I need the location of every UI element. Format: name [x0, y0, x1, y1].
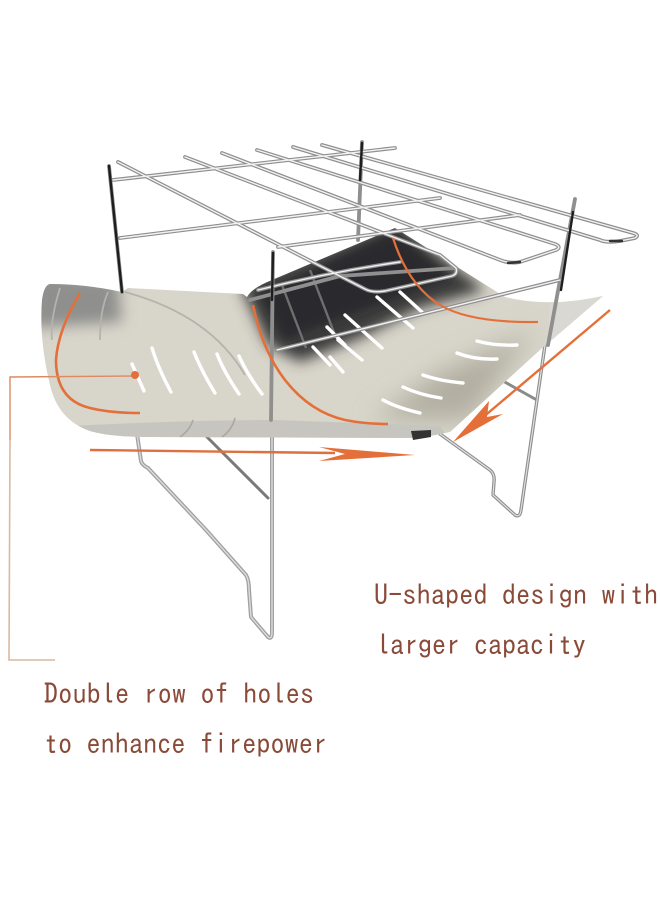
text: U-shaped design caption: larger capacity: [376, 631, 586, 659]
back wire posts and legs behind tray: [137, 345, 545, 638]
tray tip: [549, 296, 602, 340]
text: U-shaped design caption: U-shaped design with: [374, 581, 658, 609]
orange arc: left end of tray: [56, 293, 140, 413]
arrow: pointing right: [90, 447, 415, 461]
orange arc: middle of tray: [253, 305, 388, 424]
arrow: pointing down-left: [453, 310, 610, 442]
text: double row of holes caption: to enhance firepower: [44, 730, 327, 758]
dark post highlights: [109, 143, 573, 300]
tray back dark shading: [240, 220, 485, 362]
text: double row of holes caption: [44, 680, 327, 758]
infographic: grill with callouts: [8, 140, 656, 756]
grate rods dark layer: [109, 142, 637, 420]
hinge: [411, 430, 431, 440]
grate rods light layer: [113, 145, 637, 350]
tray creases: [52, 288, 245, 375]
air holes: [132, 292, 517, 413]
panel: U-shaped fire tray: [41, 228, 603, 438]
orange arc: right of tray: [393, 238, 538, 322]
callout leader line with dot: [9, 371, 139, 660]
tray lower band: [78, 420, 445, 438]
tray base colour: [41, 228, 603, 438]
panel: wire cooking grate: [109, 142, 637, 420]
tray right-side darker band: [372, 330, 535, 420]
text: U-shaped design caption: [374, 581, 658, 659]
text: double row of holes caption: Double row of holes: [44, 680, 314, 708]
tray left gray shading: [41, 284, 129, 335]
